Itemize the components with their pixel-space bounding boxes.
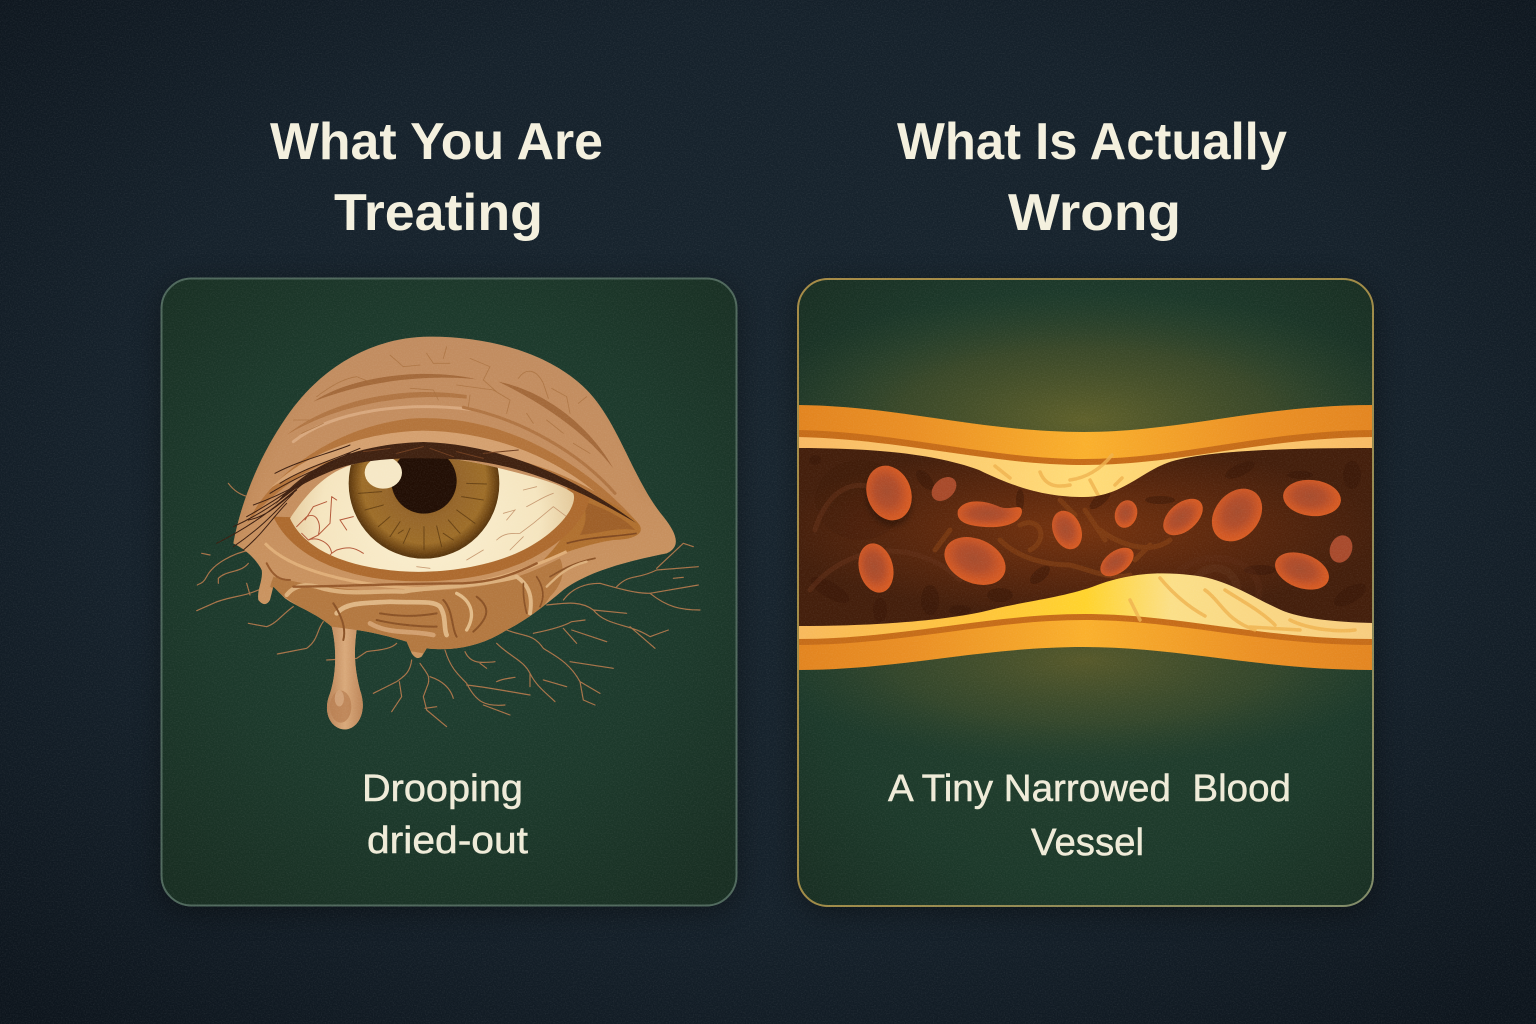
lumen texture [808,466,1276,602]
drip shading [327,617,363,729]
lower eyelid socket [273,488,590,581]
inner corner [543,487,641,560]
heading: What Is Actually Wrong: What Is Actually [897,113,1287,171]
illustration: narrowed blood vessel [798,405,1373,670]
vessel lumen [798,448,1373,626]
bloodshot veins [297,487,567,568]
brow creases [287,347,615,493]
heading: What You Are Treating: Treating [334,184,543,242]
melted lower tissue [270,558,563,657]
inner vessel layer and plaque [798,430,1373,645]
caption: Drooping dried-out: Drooping [362,768,523,810]
caption: Drooping dried-out [362,768,528,862]
iris [348,458,500,559]
catchlight [365,457,402,489]
caption: Drooping dried-out: dried-out [367,820,528,862]
upper lash band [275,442,637,523]
heading: What You Are Treating: What You Are [270,113,603,171]
heading: What Is Actually Wrong: Wrong [1008,184,1181,242]
upper eyelid fold [247,418,638,523]
lashes [217,445,518,550]
heading: What You Are Treating [270,113,603,242]
caption: A Tiny Narrowed Blood Vessel: A Tiny Narrowed Blood [888,768,1291,810]
panel: what is actually wrong [798,279,1374,912]
caption: A Tiny Narrowed Blood Vessel [888,768,1291,864]
red blood cells [853,459,1356,597]
skin silhouette with drips [233,337,676,729]
golden panel border [798,279,1373,906]
plaque fissures [995,455,1355,631]
outer vessel wall [798,405,1373,670]
iris fibres [358,483,487,550]
panel: what you are treating [161,278,737,912]
dried vein tendrils [197,483,700,727]
pupil [392,458,457,514]
dome edge shading [270,558,563,654]
melted lower lid folds [267,558,595,640]
heading: What Is Actually Wrong [897,113,1287,242]
illustration: drooping dried-out eye [197,327,710,729]
caption: A Tiny Narrowed Blood Vessel: Vessel [1031,822,1144,864]
sclera [290,457,574,572]
